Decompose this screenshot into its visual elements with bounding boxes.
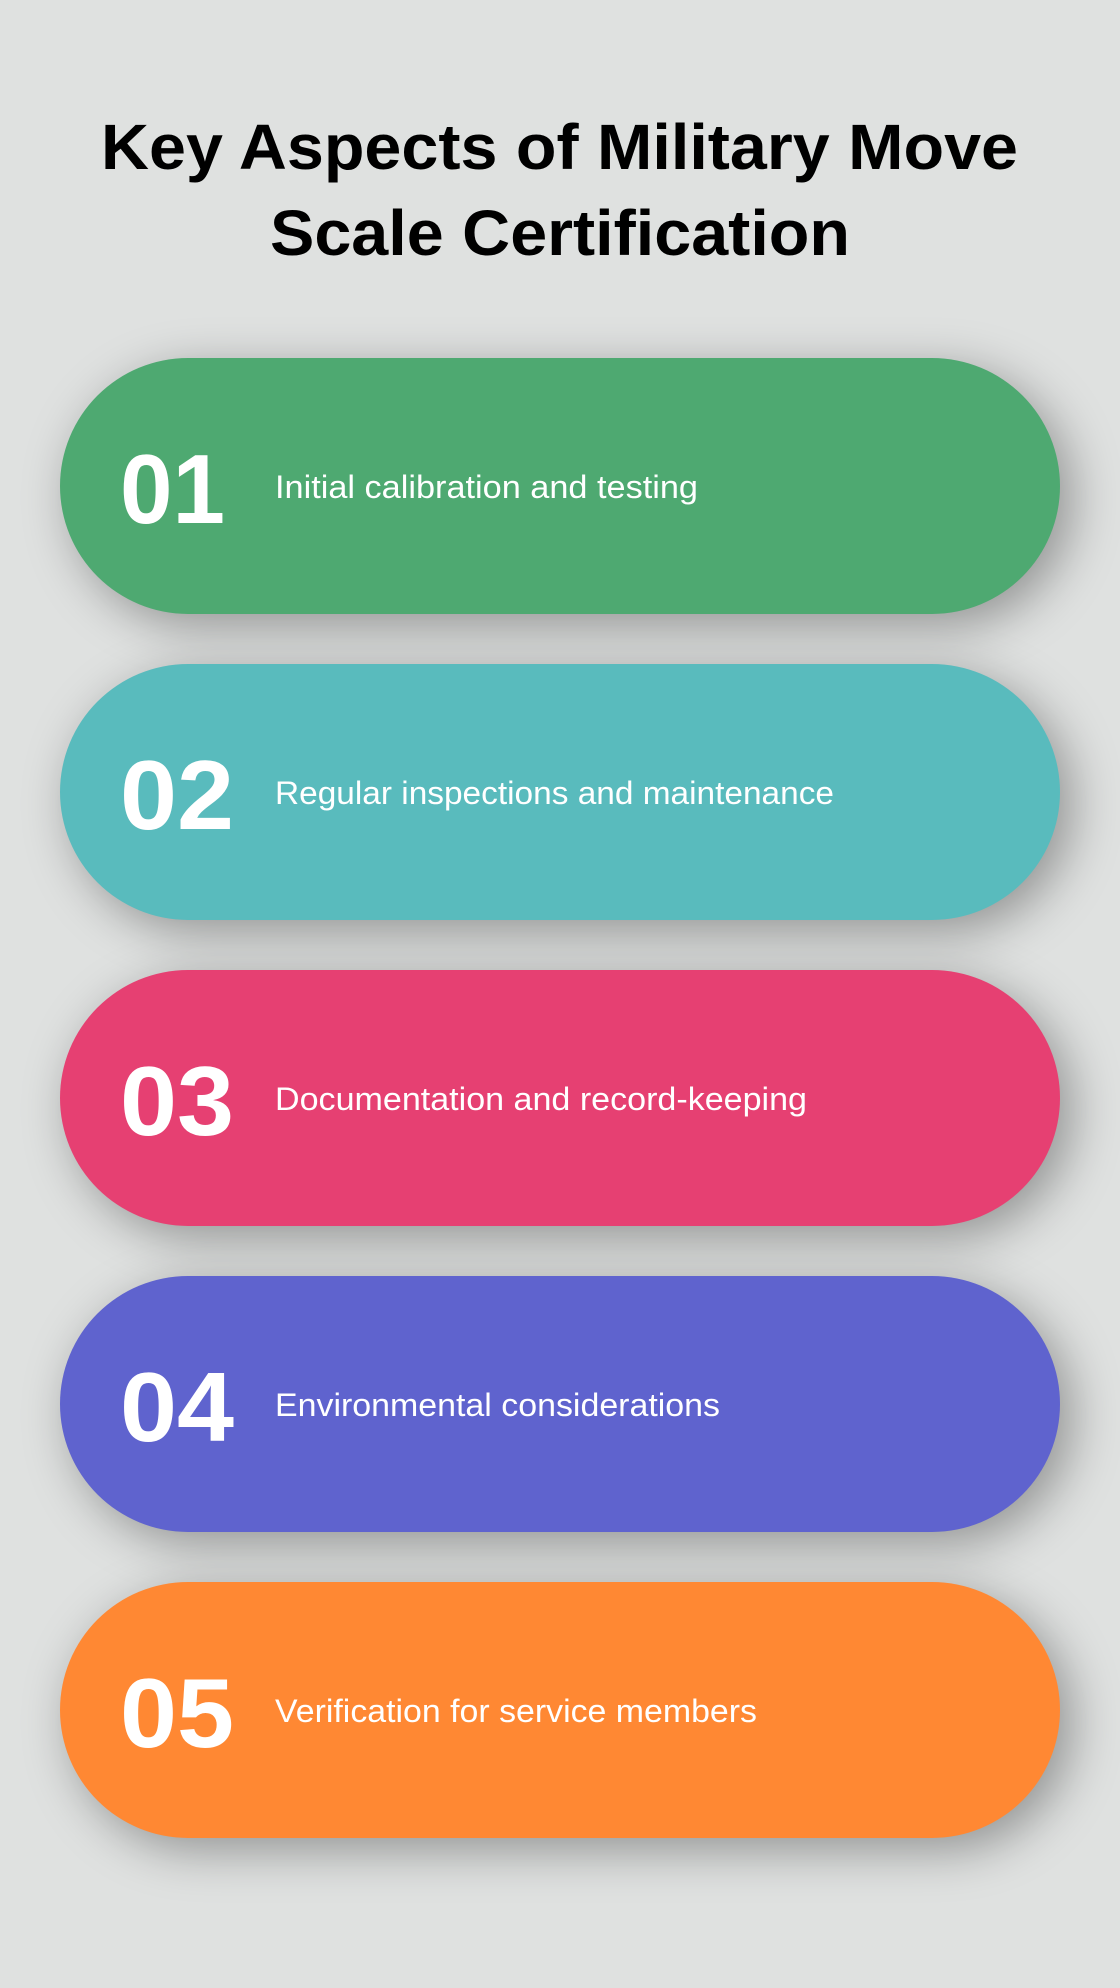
panel: item 02 bbox=[60, 664, 1060, 920]
label: environmental: Environmental considerations bbox=[275, 1387, 720, 1423]
label: initial calibration: Initial calibration and testing bbox=[275, 469, 698, 505]
number 05: 05 bbox=[120, 1658, 234, 1768]
panel: item 04 bbox=[60, 1276, 1060, 1532]
title: Key Aspects of Military Move bbox=[101, 111, 1018, 183]
panel: item 03 bbox=[60, 970, 1060, 1226]
number 02: 02 bbox=[120, 740, 234, 850]
number 03: 03 bbox=[120, 1046, 234, 1156]
label: regular inspections: Regular inspections and maintenance bbox=[275, 775, 834, 811]
title: Scale Certification bbox=[270, 197, 850, 269]
number 04: 04 bbox=[120, 1352, 234, 1462]
label: documentation: Documentation and record-keeping bbox=[275, 1081, 807, 1117]
title bbox=[101, 111, 1018, 269]
panel: item 05 bbox=[60, 1582, 1060, 1838]
label: verification: Verification for service members bbox=[275, 1693, 757, 1729]
number 01: 01 bbox=[120, 434, 225, 544]
panel: item 01 bbox=[60, 358, 1060, 614]
